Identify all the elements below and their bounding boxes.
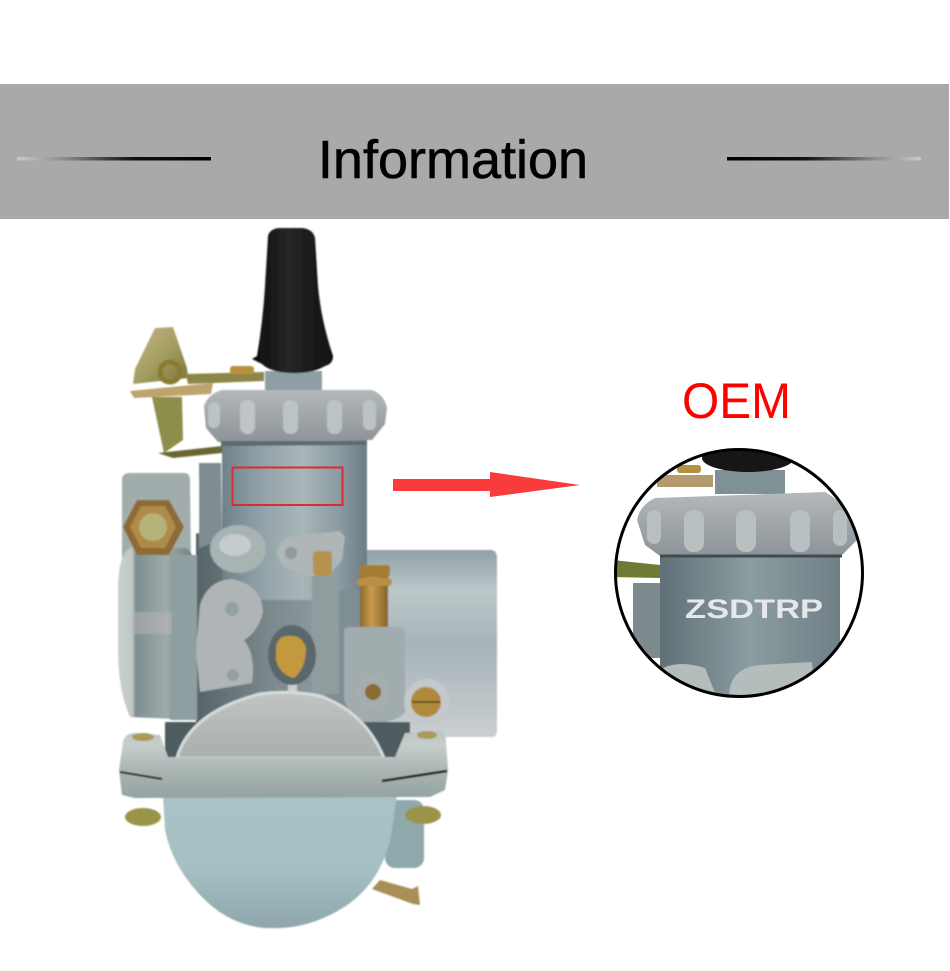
inset side block xyxy=(633,583,661,658)
carburetor neck xyxy=(265,371,322,391)
left divider line xyxy=(17,157,211,160)
right divider line xyxy=(727,157,921,160)
inset logo: ZSDTRP xyxy=(685,594,823,624)
hex nut xyxy=(123,500,184,555)
inset neck xyxy=(715,470,785,494)
red marker box xyxy=(232,468,342,505)
knurled lid xyxy=(204,390,387,446)
cast levers xyxy=(196,525,266,692)
needle screw xyxy=(268,625,316,692)
adjustment screw xyxy=(404,679,450,725)
mixture block xyxy=(344,627,405,724)
inset magnifier circle xyxy=(612,444,862,696)
OEM label: OEM xyxy=(682,373,791,429)
bowl dome xyxy=(177,692,384,758)
header band xyxy=(0,84,949,219)
bowl drain tube xyxy=(372,880,420,905)
vertical column xyxy=(312,576,339,694)
inset cylinder xyxy=(660,555,840,695)
inset knurled lid xyxy=(637,492,857,556)
brass barb fitting xyxy=(357,565,392,632)
side block xyxy=(199,463,222,548)
inset rubber cap xyxy=(702,451,792,472)
left clamp xyxy=(118,473,198,720)
flange screws xyxy=(125,731,441,826)
inset cast levers xyxy=(663,662,814,695)
lower body xyxy=(196,530,326,740)
title: Information xyxy=(318,130,588,190)
lower right body xyxy=(326,590,367,730)
inset bracket xyxy=(612,465,713,578)
white gap xyxy=(192,478,199,533)
intake tube xyxy=(366,550,497,737)
flange shadow xyxy=(165,722,410,758)
throttle bracket xyxy=(130,327,264,458)
red arrow xyxy=(393,472,580,497)
fuel bowl xyxy=(163,795,424,928)
bowl flange xyxy=(119,731,448,798)
inset ring xyxy=(616,450,862,696)
rubber cap xyxy=(252,228,333,373)
linkage plate and nut xyxy=(277,531,345,577)
cylinder body xyxy=(222,440,367,600)
carburetor illustration xyxy=(118,228,497,928)
